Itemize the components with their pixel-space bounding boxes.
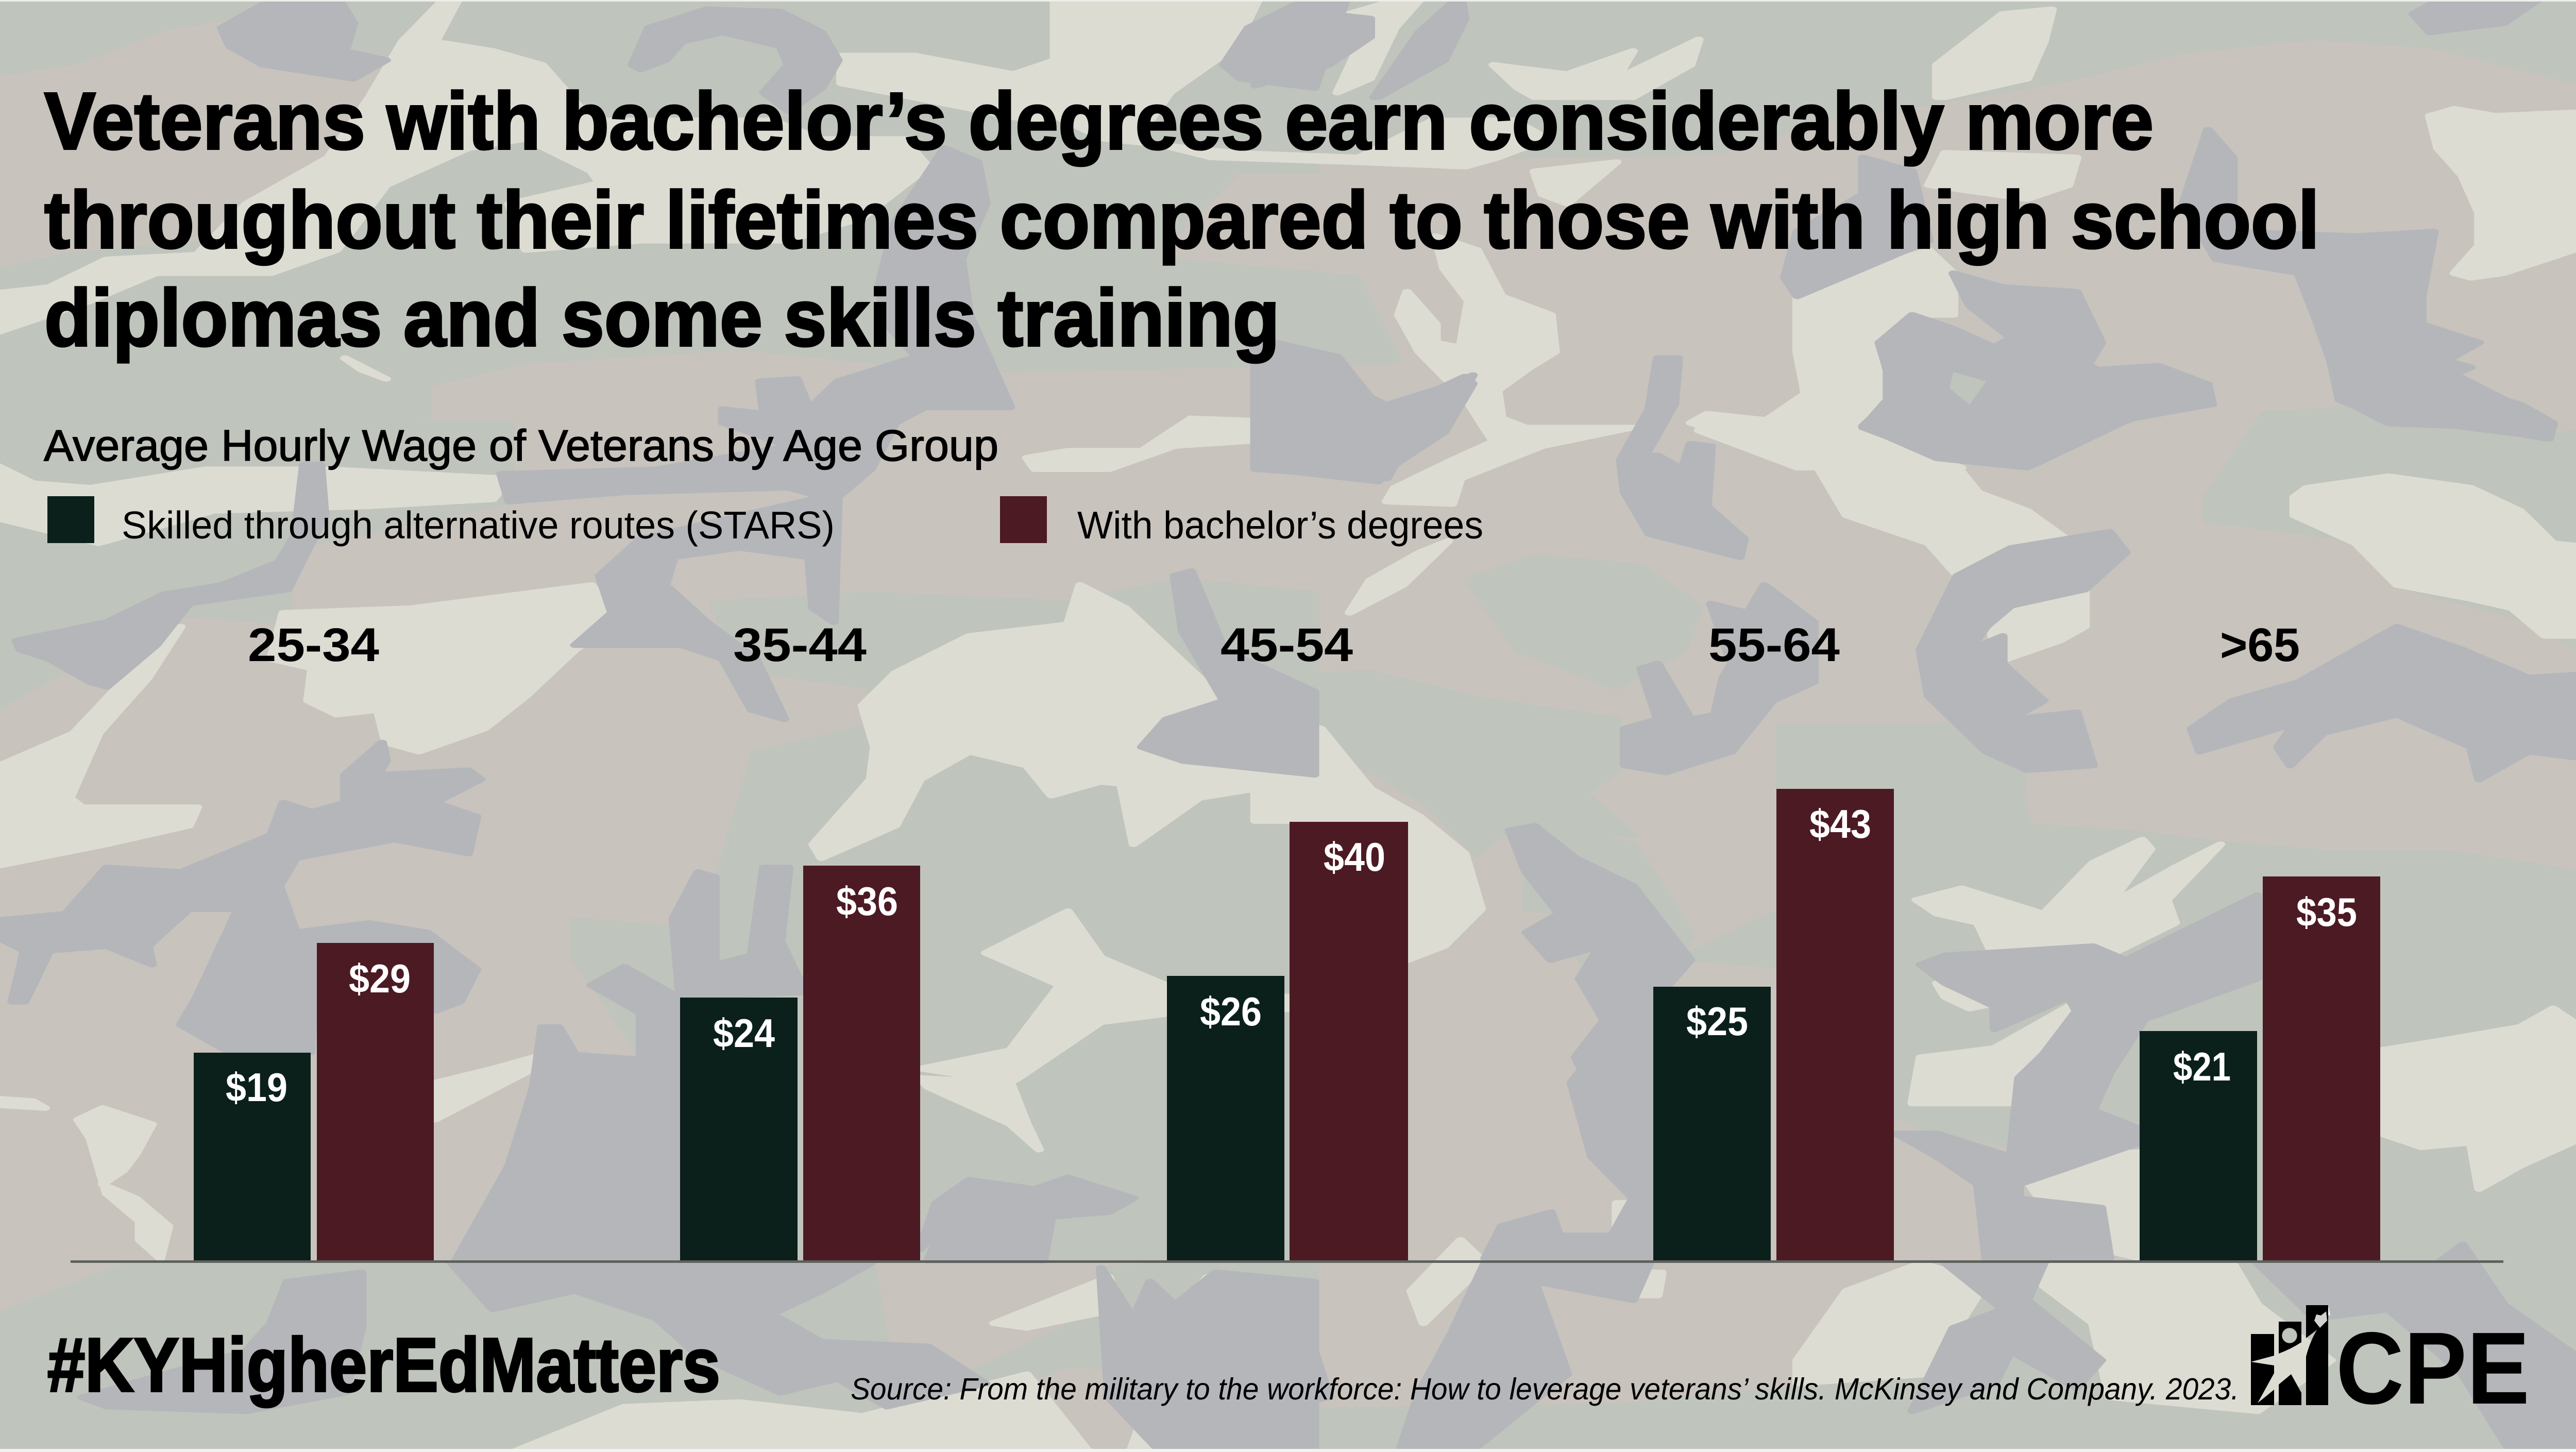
age group headers: 25-34 bbox=[248, 619, 379, 671]
bars: 55-64: $43 bbox=[1809, 801, 1871, 847]
bars: 35-44 bbox=[680, 866, 920, 1261]
bars: over 65 bbox=[2140, 876, 2380, 1261]
bars: over 65: $21 bbox=[2173, 1044, 2231, 1089]
age group headers: 55-64 bbox=[1708, 619, 1840, 671]
bar chart bbox=[71, 789, 2503, 1263]
bars: 35-44: $24 bbox=[713, 1010, 775, 1056]
title: throughout their lifetimes compared to those with high school bbox=[44, 175, 2319, 265]
age group headers: >65 bbox=[2220, 619, 2300, 671]
bars: 25-34: $19 bbox=[226, 1065, 287, 1110]
CPE logo bbox=[2251, 1305, 2530, 1426]
bars: 45-54: $40 bbox=[1324, 834, 1385, 880]
bars: 25-34 bbox=[194, 943, 434, 1261]
legend label: bachelor's degrees: With bachelor’s degrees bbox=[1077, 503, 1483, 547]
bars: over 65: $35 bbox=[2296, 889, 2357, 935]
chart subtitle: Average Hourly Wage of Veterans by Age Group bbox=[44, 421, 998, 470]
axis line bbox=[71, 1260, 2503, 1263]
logo wordmark: CPE bbox=[2336, 1311, 2530, 1426]
legend bbox=[47, 496, 1483, 547]
bars: 55-64 bbox=[1653, 789, 1894, 1261]
bars: 35-44: $36 bbox=[836, 879, 898, 924]
legend swatch: alternative routes bbox=[47, 496, 94, 543]
icon: bars with rising figure and star bbox=[2251, 1305, 2330, 1405]
legend label: alternative routes: Skilled through alternative routes (STARS) bbox=[122, 503, 835, 547]
bars: 55-64: $25 bbox=[1686, 999, 1748, 1044]
bars: 45-54 bbox=[1167, 822, 1408, 1261]
title bbox=[44, 76, 2319, 363]
hashtag: #KYHigherEdMatters bbox=[47, 1323, 720, 1408]
title: Veterans with bachelor’s degrees earn considerably more bbox=[44, 76, 2154, 166]
source note: Source: From the military to the workforce: How to leverage veterans’ skills. McKinsey and Company. 2023. bbox=[851, 1372, 2239, 1406]
legend swatch: bachelor's degrees bbox=[1000, 496, 1047, 543]
age group headers bbox=[248, 619, 2300, 671]
title: diplomas and some skills training bbox=[44, 273, 1280, 363]
age group headers: 45-54 bbox=[1221, 619, 1353, 671]
bars: 25-34: $29 bbox=[349, 956, 411, 1001]
bars: 45-54: $26 bbox=[1200, 989, 1262, 1034]
age group headers: 35-44 bbox=[733, 619, 867, 671]
